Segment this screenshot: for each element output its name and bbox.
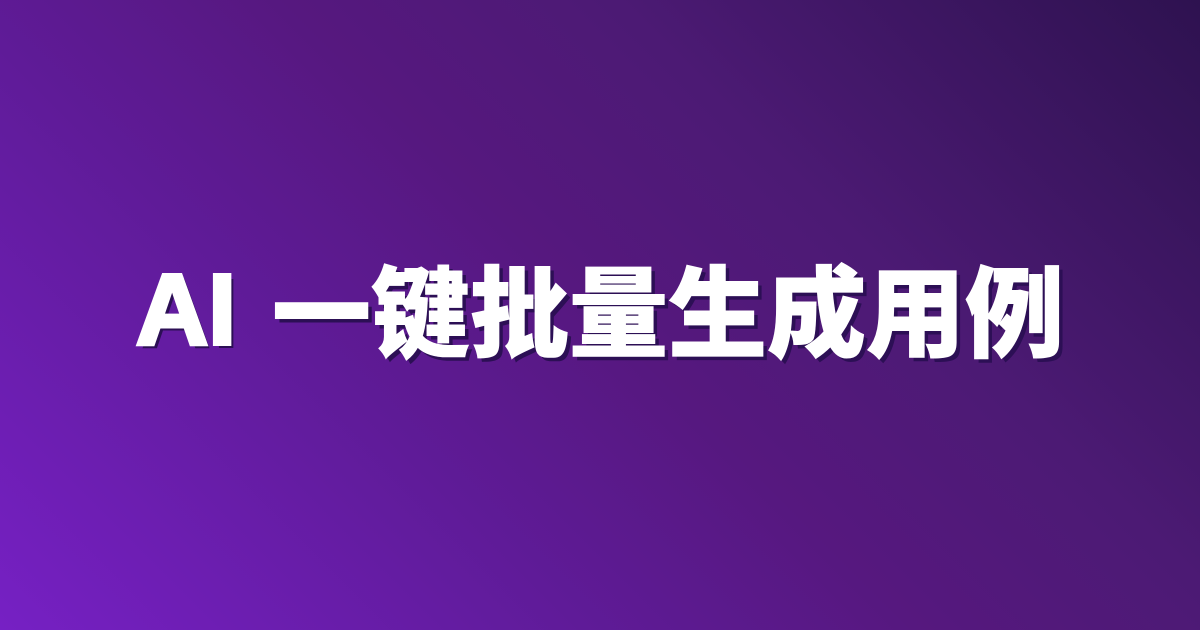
title: AI	[136, 254, 236, 366]
title: 一键批量生成用例	[272, 259, 1064, 370]
